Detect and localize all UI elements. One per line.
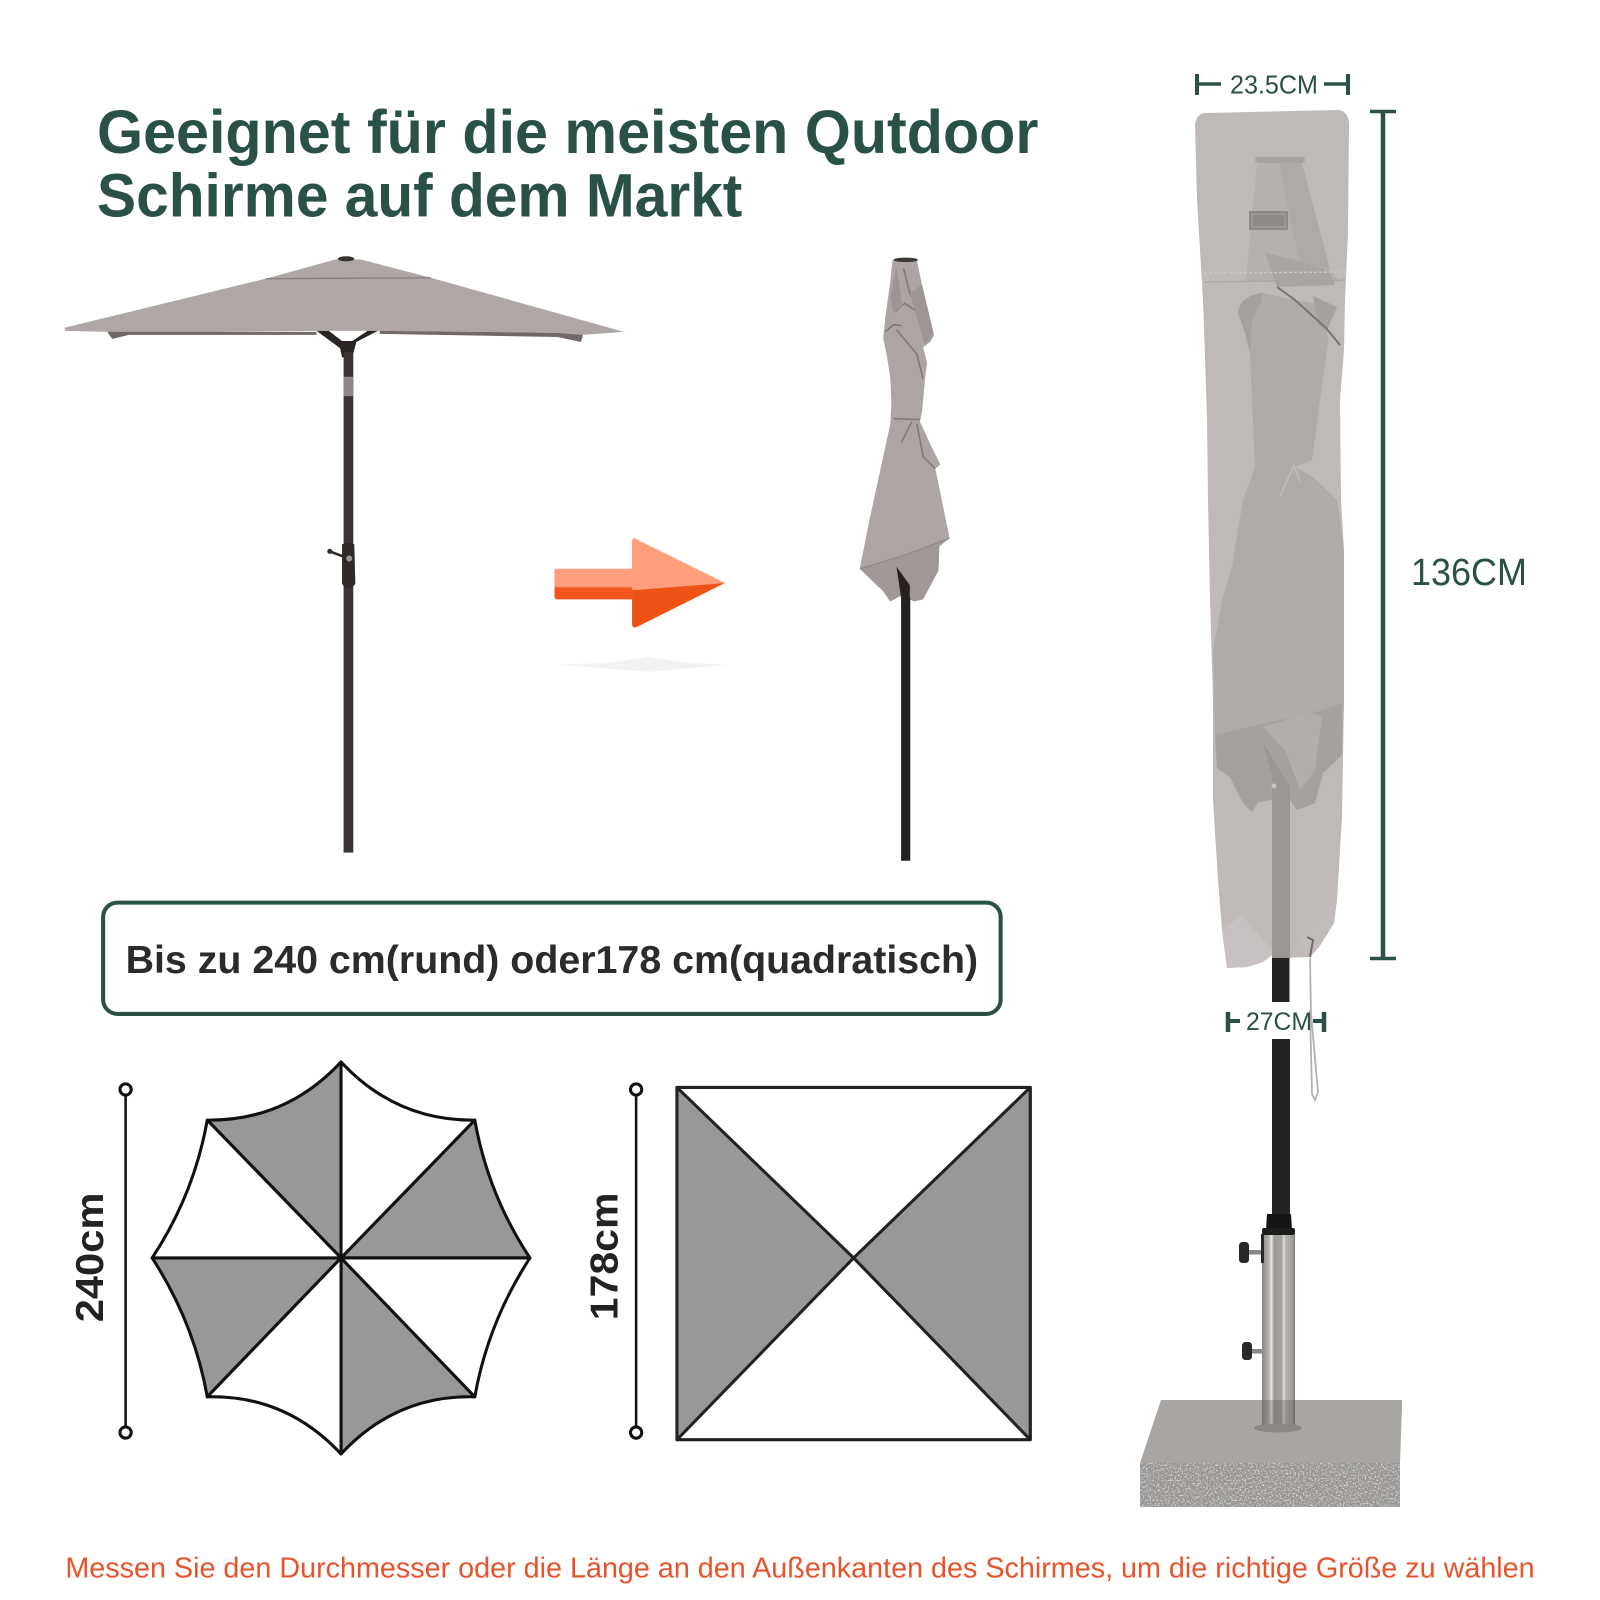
- dimension 136cm: 136CM: [1411, 552, 1527, 594]
- seam and zip: [1204, 272, 1345, 497]
- title: Geeignet für die meisten Qutdoor: [97, 98, 1038, 166]
- dimension 178cm: [584, 1084, 642, 1438]
- round umbrella diagram: [152, 1062, 530, 1454]
- pole: [1272, 958, 1290, 1214]
- title: Schirme auf dem Markt: [97, 161, 742, 229]
- arrow shadow: [560, 657, 727, 672]
- dimension 178cm: 178cm: [584, 1193, 627, 1320]
- granite base: [1140, 1400, 1402, 1507]
- folded top seen through cover: [1245, 157, 1340, 287]
- cover brand label: [1249, 211, 1288, 230]
- stainless steel mount: [1239, 1214, 1302, 1432]
- protective cover: [1195, 110, 1349, 968]
- orange arrow: [554, 538, 725, 628]
- dimension 136cm: [1370, 112, 1527, 959]
- closed umbrella photo: [860, 258, 950, 861]
- open umbrella photo: [64, 256, 624, 853]
- size callout box: [103, 903, 1001, 1014]
- covered umbrella photo: [1195, 110, 1349, 968]
- draw cord: [1310, 958, 1318, 1100]
- size callout box: Bis zu 240 cm(rund) oder178 cm(quadratisch): [126, 939, 978, 982]
- dimension 23.5cm: 23.5CM: [1230, 70, 1318, 100]
- dimension 240cm: 240cm: [69, 1193, 112, 1322]
- pole through cover: [1263, 743, 1290, 958]
- folded body seen through cover: [1213, 293, 1344, 812]
- canopy underside: [1215, 703, 1342, 812]
- dimension 27cm: [1227, 1008, 1324, 1036]
- footer note: Messen Sie den Durchmesser oder die Länge an den Außenkanten des Schirmes, um die richtige Größe zu wählen: [65, 1553, 1535, 1585]
- dimension 240cm: [69, 1084, 131, 1438]
- dimension 27cm: 27CM: [1246, 1008, 1312, 1036]
- square umbrella diagram: [677, 1087, 1030, 1440]
- upper body shadows: [1238, 293, 1337, 353]
- title: [97, 98, 1038, 229]
- cover hem: [1222, 900, 1337, 968]
- dimension 23.5cm: [1196, 70, 1349, 100]
